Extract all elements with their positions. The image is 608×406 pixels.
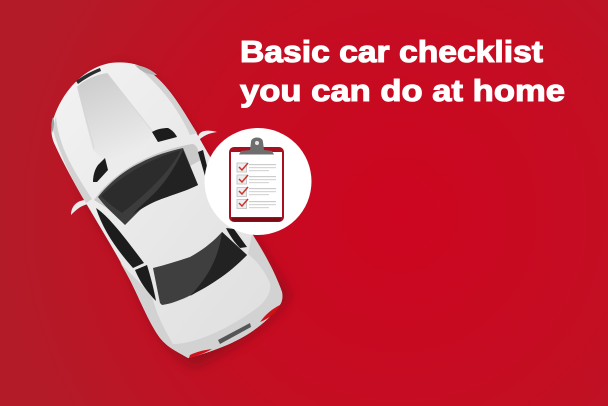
right hood vent <box>152 128 177 142</box>
front grille <box>76 68 101 84</box>
badge: white circle with clipboard <box>204 128 312 235</box>
windshield frame <box>94 144 201 210</box>
left mirror <box>71 200 88 215</box>
hood crease lines <box>78 73 153 148</box>
car illustration <box>51 62 292 368</box>
car shadow <box>60 65 292 368</box>
right side front window <box>198 150 210 178</box>
left tail light <box>189 349 212 358</box>
left side front window <box>96 208 144 268</box>
clipboard bottom edge <box>232 218 281 222</box>
car body <box>51 62 282 358</box>
windshield <box>98 148 198 225</box>
rear window <box>153 232 247 305</box>
right headlight <box>135 65 157 75</box>
title: Basic car checklist <box>240 34 543 69</box>
clipboard paper <box>231 152 282 217</box>
right tail light <box>260 305 280 322</box>
rear side shading <box>120 234 282 358</box>
clipboard clip <box>239 138 274 154</box>
clipboard board <box>229 147 284 222</box>
item 1 <box>237 163 276 172</box>
title: you can do at home <box>240 73 565 108</box>
left headlight <box>51 117 54 133</box>
hood centre stripe <box>77 73 153 164</box>
left hood vent <box>93 158 108 182</box>
item 4 <box>237 199 276 208</box>
right mirror <box>198 131 217 140</box>
front side shading <box>53 65 197 203</box>
title <box>240 34 565 108</box>
clip hole <box>255 141 259 145</box>
rear spoiler <box>218 323 251 344</box>
rear window dark part <box>190 232 247 296</box>
windshield dark area <box>133 150 198 214</box>
checklist items <box>237 163 276 208</box>
left side rear window <box>135 265 156 301</box>
right side rear window <box>226 228 247 248</box>
item 3 <box>237 187 276 196</box>
item 2 <box>237 175 276 184</box>
